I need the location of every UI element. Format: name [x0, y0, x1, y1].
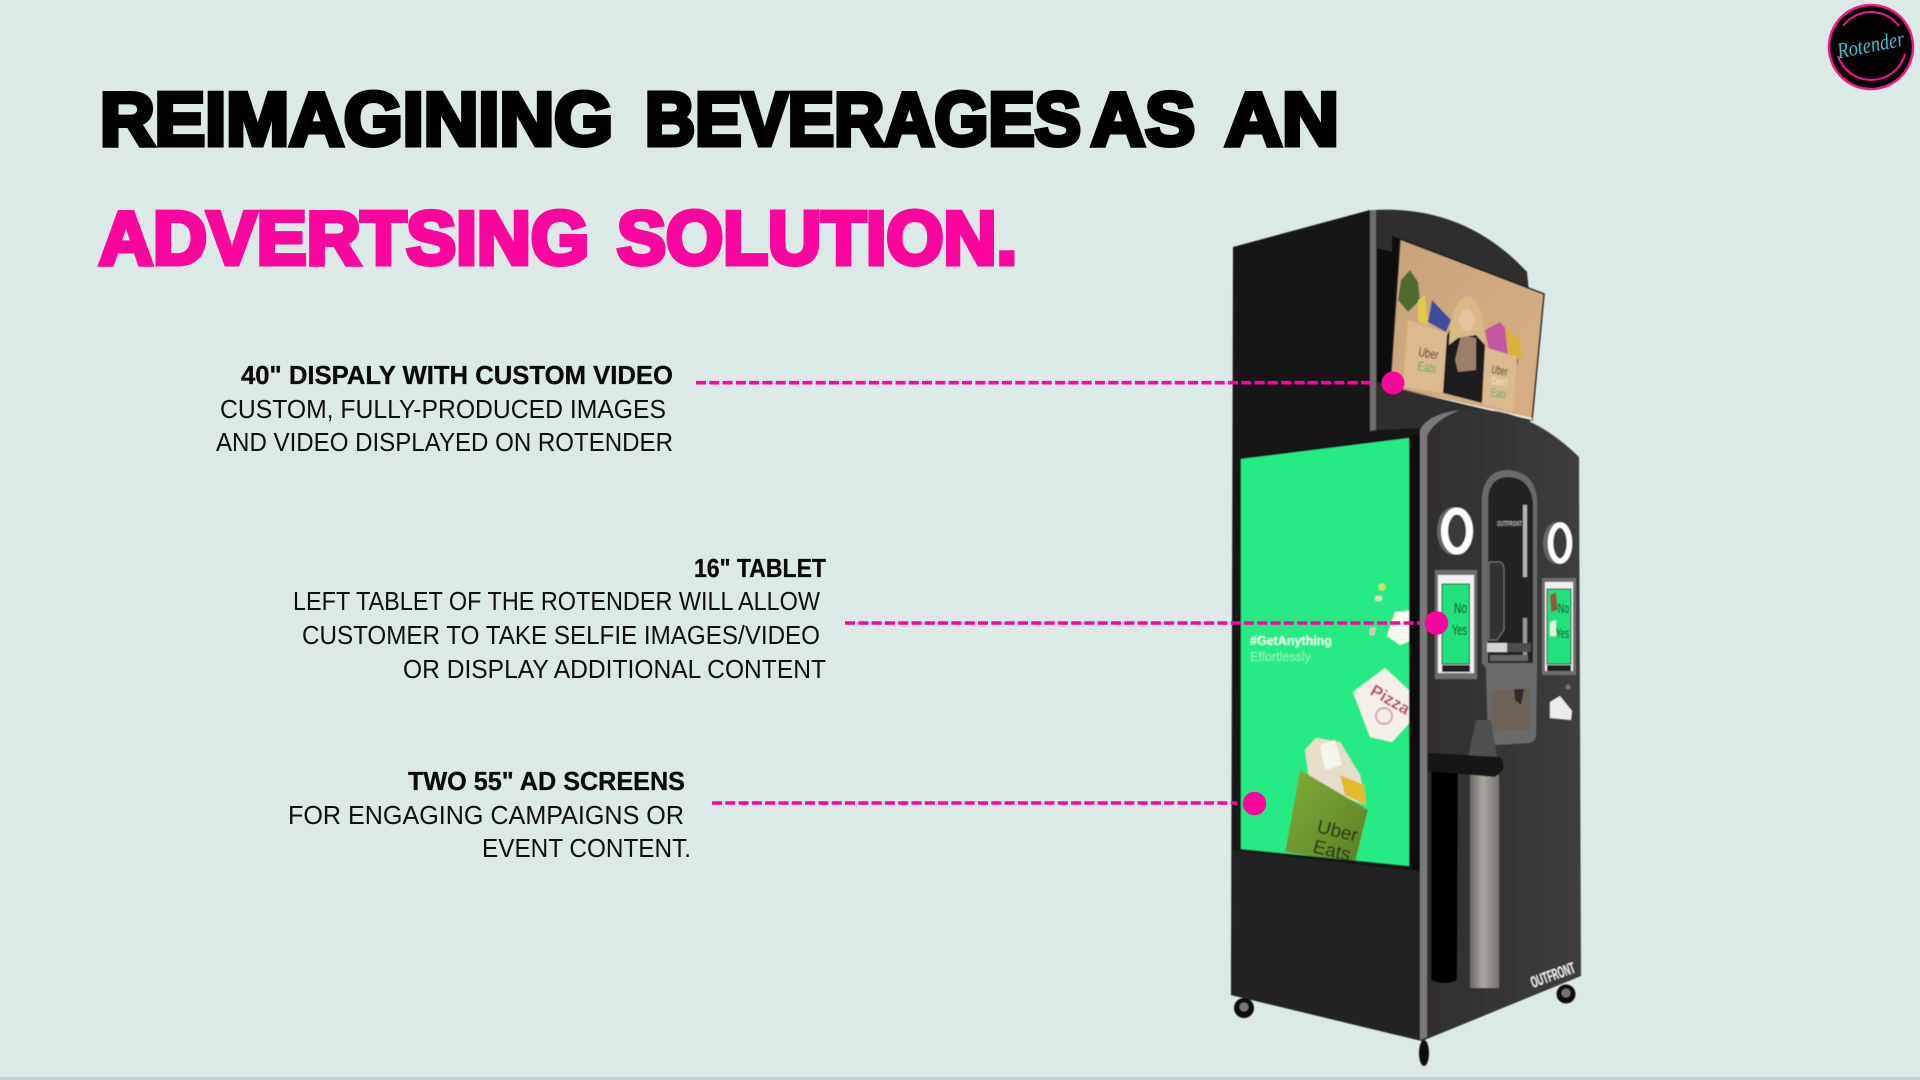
title line 1 — [100, 77, 1339, 161]
left side panel — [1231, 210, 1422, 1041]
right small tablet — [1542, 578, 1576, 675]
display bezel — [1377, 235, 1400, 387]
title — [99, 77, 1339, 280]
wheels — [1234, 984, 1576, 1066]
grocery bag: Eats — [1311, 836, 1353, 866]
40 inch display — [1388, 239, 1544, 424]
ad screen text: #GetAnything — [1250, 634, 1332, 648]
40 inch display: Uber — [1490, 362, 1509, 379]
left small tablet: No — [1454, 600, 1467, 617]
cup dispenser — [1428, 720, 1504, 988]
black gutter beside ad screen — [1409, 434, 1420, 872]
title line 2: SOLUTION. — [617, 196, 1017, 280]
callout 2: 16 inch tablet text: OR DISPLAY ADDITIONAL CONTENT — [403, 654, 826, 684]
callout 3: two 55 inch ad screens text: EVENT CONTENT. — [482, 833, 691, 863]
white card reader — [1550, 684, 1572, 720]
title line 1: BEVERAGES — [645, 77, 1081, 161]
grocery bag: Uber — [1315, 816, 1360, 847]
leader line 3 — [712, 792, 1266, 815]
pin and cup — [1370, 584, 1412, 645]
title line 1: AS — [1091, 77, 1195, 161]
right small tablet: Yes — [1556, 625, 1569, 641]
callout 2: 16 inch tablet text: CUSTOMER TO TAKE SELFIE IMAGES/VIDEO — [302, 620, 820, 650]
kiosk machine — [1231, 210, 1581, 1066]
callout 2: 16 inch tablet text: LEFT TABLET OF THE ROTENDER WILL ALLOW — [293, 586, 820, 616]
callout 1: 40 inch display text: AND VIDEO DISPLAYED ON ROTENDER — [216, 427, 673, 457]
leader line 1 — [696, 372, 1404, 394]
callout 2: 16 inch tablet text — [293, 553, 826, 684]
title line 2: ADVERTSING — [99, 196, 589, 280]
dispenser arch: OUTFRONT — [1497, 521, 1522, 528]
callout 3: two 55 inch ad screens text — [288, 766, 691, 863]
upper cabinet front — [1374, 210, 1530, 430]
callout 3: two 55 inch ad screens text: TWO 55" AD SCREENS — [408, 766, 685, 796]
callout 1: 40 inch display text — [216, 360, 673, 457]
right small tablet: No — [1558, 600, 1569, 616]
left small tablet — [1435, 570, 1477, 679]
title line 2 — [99, 196, 1017, 280]
callout 1: 40 inch display text: CUSTOM, FULLY-PRODUCED IMAGES — [220, 394, 666, 424]
logo: Rotender: Rotender — [1834, 26, 1907, 63]
title line 1: AN — [1225, 77, 1339, 161]
pizza box: Pizza — [1367, 681, 1414, 719]
pizza box — [1353, 668, 1414, 742]
callout 3: two 55 inch ad screens text: FOR ENGAGING CAMPAIGNS OR — [288, 800, 684, 830]
logo: Rotender — [1829, 5, 1913, 89]
leader line 2 — [845, 611, 1448, 635]
right ring light — [1543, 522, 1570, 564]
grocery bag — [1285, 738, 1368, 866]
silver edge strip — [1420, 410, 1460, 1040]
40 inch display: Eats — [1416, 358, 1438, 376]
main cabinet front face — [1422, 410, 1581, 1041]
ad screen text — [1250, 634, 1332, 664]
40 inch display: Uber — [1417, 344, 1440, 363]
40 inch display: Eats — [1489, 385, 1508, 402]
dispenser arch — [1482, 470, 1537, 745]
callout 2: 16 inch tablet text: 16" TABLET — [694, 553, 826, 583]
55 inch ad screen — [1241, 438, 1414, 866]
left ring light — [1437, 507, 1470, 555]
OUTFRONT brand label: OUTFRONT — [1529, 960, 1578, 992]
ad screen text: Effortlessly — [1250, 650, 1312, 664]
40 inch display: Don't — [1490, 375, 1508, 390]
callout 1: 40 inch display text: 40" DISPALY WITH CUSTOM VIDEO — [241, 360, 673, 390]
left small tablet: Yes — [1452, 622, 1467, 639]
title line 1: REIMAGINING — [100, 77, 613, 161]
